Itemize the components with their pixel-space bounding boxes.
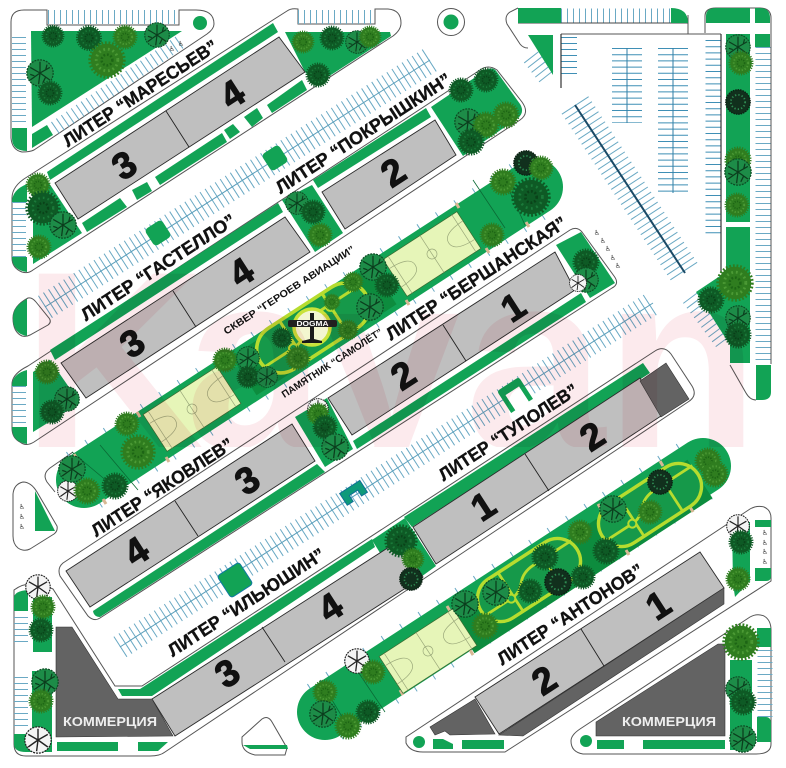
building labels: ЛИТЕР “ЯКОВЛЕВ” — [88, 434, 237, 541]
building numbers: 4 — [212, 71, 252, 117]
building numbers: 1 — [463, 484, 503, 529]
building labels: ЛИТЕР “ГАСТЕЛЛО” — [77, 210, 239, 325]
building labels: КОММЕРЦИЯ — [622, 714, 716, 729]
building labels: СКВЕР “ГЕРОЕВ АВИАЦИИ” — [222, 244, 357, 337]
building numbers: 4 — [116, 528, 156, 574]
accessible parking icons: ♿ — [169, 45, 175, 53]
accessible parking icons: ♿ — [610, 254, 616, 262]
building numbers: 2 — [383, 353, 423, 398]
monument: plane with DOGMA — [288, 309, 337, 345]
capsule parks — [72, 170, 703, 732]
building numbers: 4 — [310, 584, 350, 630]
building labels: КОММЕРЦИЯ — [63, 714, 157, 729]
accessible parking icons: ♿ — [762, 539, 768, 547]
building numbers: 1 — [493, 285, 533, 330]
building labels: ЛИТЕР “ПОКРЫШКИН” — [272, 69, 455, 198]
building labels — [59, 36, 716, 729]
building numbers: 4 — [221, 249, 261, 295]
building numbers: 3 — [104, 143, 144, 188]
accessible parking icons: ♿ — [762, 558, 768, 566]
accessible parking icons: ♿ — [615, 262, 621, 270]
accessible parking icons: ♿ — [178, 40, 184, 48]
ornaments — [247, 274, 710, 630]
buildings — [55, 37, 725, 737]
building numbers: 2 — [572, 414, 612, 459]
building labels: ЛИТЕР “МАРЕСЬЕВ” — [59, 36, 221, 151]
accessible parking icons: ♿ — [600, 237, 606, 245]
courts — [143, 212, 481, 693]
building labels: ЛИТЕР “ИЛЬЮШИН” — [164, 544, 328, 661]
building labels: ЛИТЕР “АНТОНОВ” — [494, 560, 647, 669]
accessible parking icons: ♿ — [19, 513, 25, 521]
accessible parking icons: ♿ — [605, 245, 611, 253]
watermark: Kayan — [22, 220, 759, 501]
green entry icons — [340, 377, 533, 505]
building numbers: 3 — [207, 651, 247, 696]
building numbers: 3 — [227, 458, 267, 503]
accessible parking icons: ♿ — [762, 529, 768, 537]
building numbers: 3 — [112, 321, 152, 366]
building numbers: 2 — [373, 150, 413, 195]
accessible parking icons — [19, 40, 768, 566]
accessible parking icons: ♿ — [594, 229, 600, 237]
accessible parking icons: ♿ — [19, 503, 25, 511]
accessible parking icons: ♿ — [19, 523, 25, 531]
building numbers — [104, 71, 678, 703]
building labels: ПАМЯТНИК “САМОЛЁТ” — [279, 325, 385, 401]
monument: plane with DOGMA: DOGMA — [296, 321, 328, 328]
building labels: ЛИТЕР “ТУПОЛЕВ” — [435, 380, 582, 485]
building numbers: 2 — [524, 658, 564, 703]
building labels: ЛИТЕР “БЕРШАНСКАЯ” — [382, 213, 570, 344]
building numbers: 1 — [638, 583, 678, 628]
accessible parking icons: ♿ — [762, 548, 768, 556]
